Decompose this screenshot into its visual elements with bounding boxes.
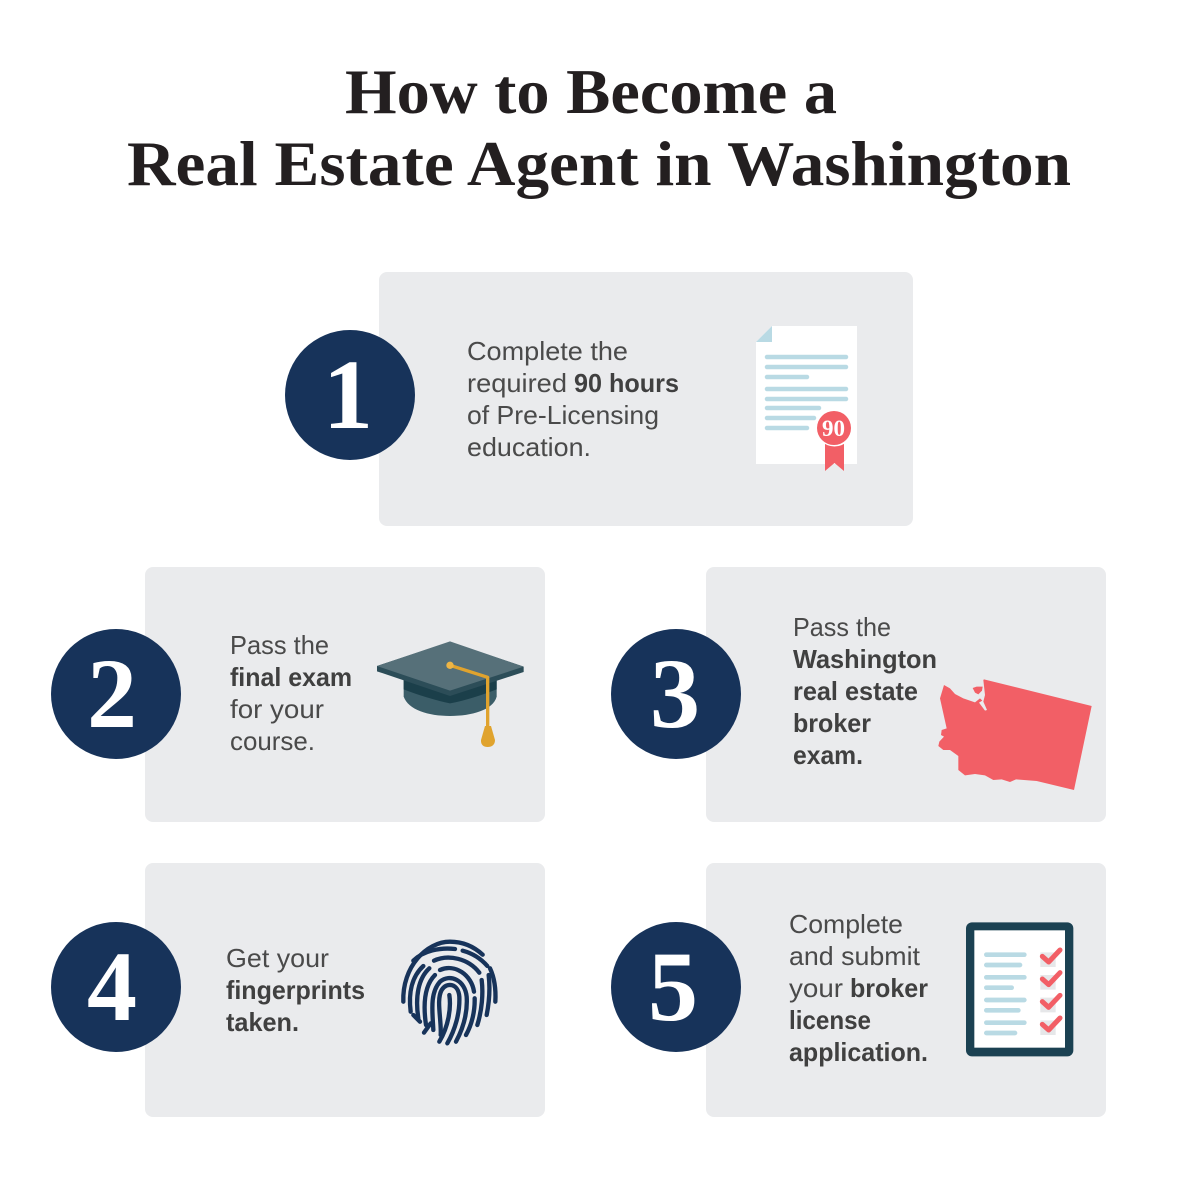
icon: graduation cap — [377, 641, 524, 747]
step 4 text — [226, 943, 365, 1037]
step 3 number badge — [611, 629, 741, 759]
panel: step 4 — [51, 863, 545, 1117]
step 1 text: Complete the — [467, 336, 628, 366]
icon: certificate document — [756, 326, 857, 471]
panel: step 2 — [51, 567, 545, 822]
icon: fingerprint — [403, 942, 495, 1043]
step 5 text: and submit — [789, 941, 921, 971]
step 3 text: Pass the — [793, 612, 891, 642]
step 2 text: final exam — [230, 662, 352, 692]
title: Real Estate Agent in Washington — [127, 128, 1071, 199]
step 5 text: your — [789, 973, 843, 1003]
step 5 number badge — [611, 922, 741, 1052]
title: How to Become a — [345, 56, 837, 127]
step 1 text: education. — [467, 432, 591, 462]
step 5 text: license — [789, 1005, 871, 1035]
step 2 text: Pass the — [230, 630, 329, 660]
step 3 text: real estate — [793, 676, 918, 706]
step 1 number badge: 1 — [323, 339, 373, 450]
step 1 text: 90 hours — [574, 368, 679, 398]
title — [127, 56, 1071, 199]
step 3 text: broker — [793, 708, 871, 738]
icon: Washington state map — [938, 679, 1092, 790]
step 3 text: Washington — [793, 644, 937, 674]
step 4 text: fingerprints — [226, 975, 365, 1005]
step 2 text — [230, 630, 352, 756]
step 2 text: for your — [230, 694, 324, 724]
step 3 number badge: 3 — [650, 638, 700, 749]
step 3 text: exam. — [793, 740, 863, 770]
step 5 text: Complete — [789, 909, 903, 939]
step 4 number badge — [51, 922, 181, 1052]
step 1 number badge — [285, 330, 415, 460]
step 5 text: broker — [850, 973, 928, 1003]
step 3 text — [793, 612, 937, 770]
step 4 text: Get your — [226, 943, 329, 973]
step 2 number badge — [51, 629, 181, 759]
step 5 text: application. — [789, 1037, 928, 1067]
step 2 text: course. — [230, 726, 315, 756]
step 5 number badge: 5 — [648, 931, 698, 1042]
step 1 text — [467, 336, 679, 462]
step 2 number badge: 2 — [87, 638, 137, 749]
panel: step 3 — [611, 567, 1106, 822]
panel: step 5 — [611, 863, 1106, 1117]
step 4 number badge: 4 — [87, 931, 137, 1042]
step 1 text: required — [467, 368, 567, 398]
step 5 text — [789, 909, 928, 1067]
panel: step 1 — [285, 272, 913, 526]
step 4 text: taken. — [226, 1007, 299, 1037]
step 1 text: of Pre-Licensing — [467, 400, 659, 430]
icon: certificate document: 90 — [822, 416, 845, 441]
icon: checklist clipboard — [966, 922, 1073, 1056]
